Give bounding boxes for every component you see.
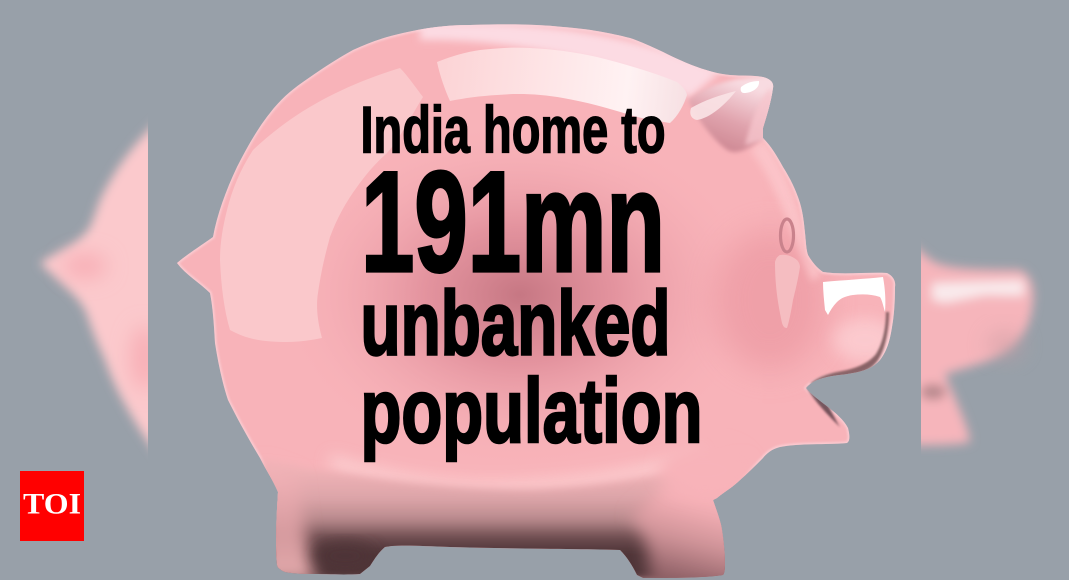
- ear: [688, 76, 776, 152]
- line: population: population: [360, 361, 702, 462]
- right cheek tint: [715, 230, 825, 370]
- pale outline rim: [177, 24, 895, 578]
- right panel snout shading: [987, 331, 1023, 359]
- upper-left body light panel: [220, 68, 423, 342]
- eye ring: [780, 219, 794, 252]
- top gloss highlight: [437, 48, 687, 123]
- rear leg light: [274, 483, 325, 574]
- rear foot shadow: [315, 542, 375, 570]
- left panel pink patches: [64, 250, 148, 390]
- pig body base: [177, 24, 895, 578]
- cheek highlight: [775, 255, 800, 328]
- snout white highlight: [823, 277, 885, 315]
- TOI logo: TOI: [23, 488, 81, 520]
- central darker glow: [350, 173, 690, 418]
- blurred right side panel: enlarged pig snout: [921, 244, 1040, 452]
- TOI logo: [20, 471, 84, 541]
- front body pink: [662, 452, 744, 482]
- underside shading: [260, 462, 730, 580]
- ear gloss: [690, 91, 736, 120]
- right head rim: [753, 142, 820, 280]
- pale top band: [420, 23, 720, 98]
- line: 191mn: 191mn: [361, 143, 665, 302]
- blurred left side panel: enlarged pig rear: [37, 122, 148, 452]
- snout light: [833, 318, 897, 362]
- mouth shadow: [807, 384, 840, 427]
- line: unbanked: unbanked: [360, 274, 670, 374]
- line: India home to: India home to: [360, 92, 666, 166]
- front leg light: [629, 480, 740, 578]
- piggy bank illustration: [177, 23, 897, 580]
- bright belly arc: [329, 454, 664, 489]
- ear sparkle: [741, 81, 759, 93]
- ear right light: [744, 90, 772, 146]
- headline text: [360, 92, 702, 462]
- snout under shadow: [811, 312, 889, 388]
